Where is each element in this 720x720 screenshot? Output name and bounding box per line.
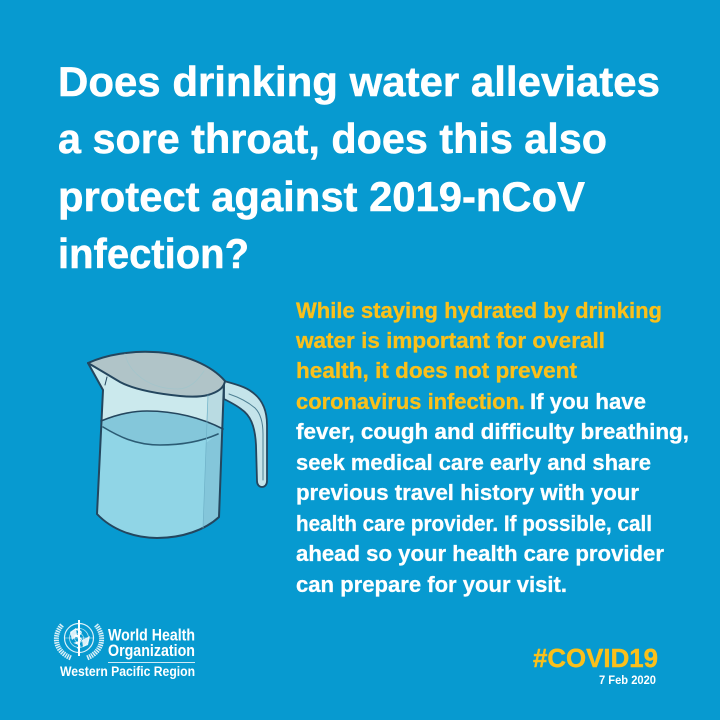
icon: water jug — [88, 352, 267, 538]
title — [58, 58, 660, 277]
jug rim — [88, 352, 225, 397]
organization name: Organization — [108, 642, 195, 660]
title: Does drinking water alleviates — [58, 58, 660, 105]
advice text: previous travel history with your — [296, 480, 639, 505]
water side shade — [203, 429, 223, 528]
highlighted message: health, it does not prevent — [296, 358, 578, 383]
title: protect against 2019-nCoV — [58, 173, 585, 220]
advice text: ahead so your health care provider — [296, 541, 664, 566]
organization name: World Health — [108, 626, 195, 644]
hashtag: #COVID19 — [533, 645, 658, 673]
logo: WHO Western Pacific Region — [56, 620, 195, 679]
highlighted message: water is important for overall — [295, 328, 605, 353]
region name: Western Pacific Region — [60, 664, 195, 679]
title: infection? — [58, 230, 249, 277]
date: 7 Feb 2020 — [599, 675, 656, 687]
water surface — [101, 411, 223, 445]
advice text — [296, 389, 689, 597]
jug handle — [224, 381, 267, 487]
organization name — [108, 626, 195, 660]
highlighted message: coronavirus infection. — [296, 389, 525, 414]
handle highlight — [229, 394, 263, 480]
body text — [295, 298, 689, 597]
highlighted message — [295, 298, 662, 414]
water front line — [103, 427, 218, 445]
advice text: If you have — [530, 389, 646, 414]
jug outline — [88, 363, 224, 538]
glass side shade — [206, 382, 224, 430]
side crease — [203, 395, 208, 528]
rim inner curve — [125, 354, 204, 389]
advice text: health care provider. If possible, call — [296, 511, 652, 536]
jug glass body — [88, 363, 224, 538]
water — [97, 411, 223, 538]
advice text: fever, cough and difficulty breathing, — [296, 419, 689, 444]
spout crease — [105, 377, 107, 385]
title: a sore throat, does this also — [58, 115, 607, 162]
advice text: seek medical care early and share — [296, 450, 651, 475]
icon: WHO emblem — [56, 620, 102, 658]
highlighted message: While staying hydrated by drinking — [296, 298, 662, 323]
advice text: can prepare for your visit. — [296, 572, 567, 597]
water line — [101, 411, 223, 429]
